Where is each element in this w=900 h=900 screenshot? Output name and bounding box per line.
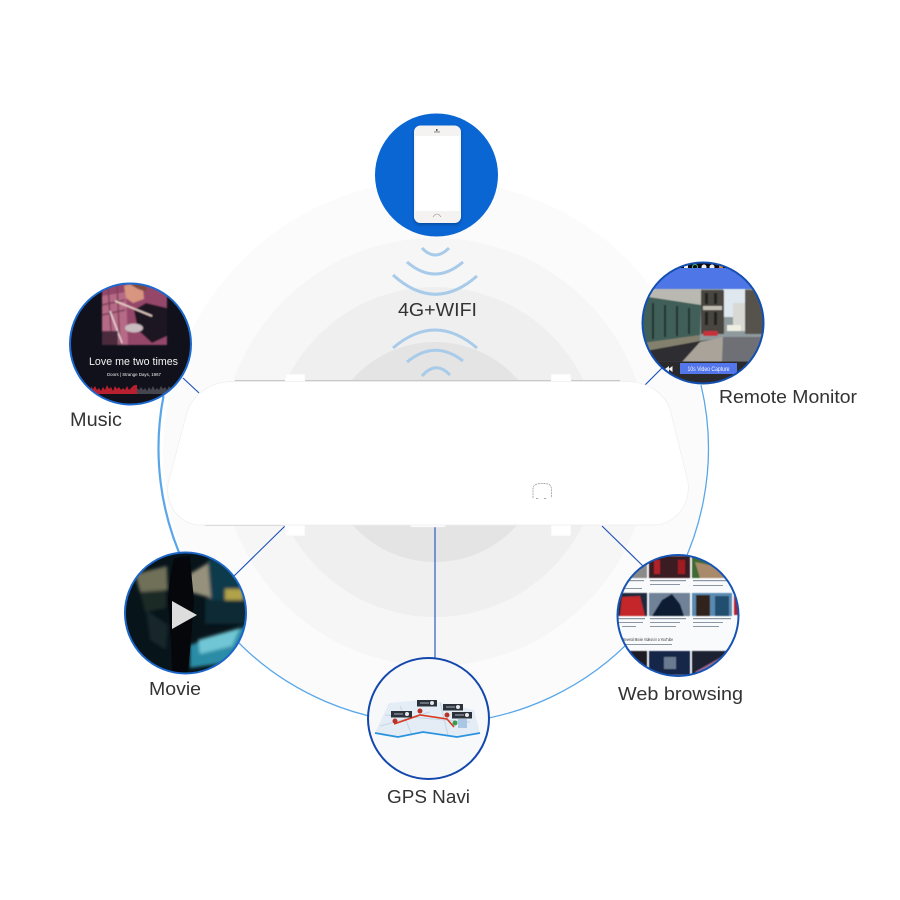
label: Movie: Movie xyxy=(149,678,201,699)
label: Music: Music xyxy=(70,410,122,431)
bottom control bar xyxy=(658,362,748,382)
web browsing badge xyxy=(618,555,739,676)
rewind icon xyxy=(665,366,672,372)
phone badge xyxy=(375,114,498,236)
caption lines xyxy=(618,580,731,645)
song subtitle: Doors | Strange Days, 1967 xyxy=(107,372,161,378)
car icon on mirror xyxy=(533,484,552,498)
blue orbit ring xyxy=(158,385,708,724)
concentric signal circles xyxy=(163,180,707,724)
audio waveform xyxy=(91,385,175,394)
route info labels xyxy=(391,700,472,718)
label: 4G+WIFI: 4G+WIFI xyxy=(398,299,477,320)
video thumbnails xyxy=(618,556,739,675)
song title: Love me two times xyxy=(89,356,178,368)
label: Remote Monitor: Remote Monitor xyxy=(719,386,857,407)
connector lines xyxy=(183,368,662,660)
street photo xyxy=(640,289,766,362)
silhouette xyxy=(168,556,194,672)
label: Web browsing: Web browsing xyxy=(618,683,743,704)
gps navi badge xyxy=(368,658,489,779)
wifi signal arcs xyxy=(393,248,477,376)
album photo xyxy=(102,283,167,345)
capture button: 10s Video Capture xyxy=(688,367,730,373)
mirror mounting tabs xyxy=(285,374,571,536)
blue title bar xyxy=(654,268,752,290)
movie badge xyxy=(124,551,250,675)
section heading: Several Movie Videos in a YouTube xyxy=(623,637,673,642)
remote monitor badge xyxy=(640,260,766,388)
map pins xyxy=(392,708,450,724)
label: GPS Navi: GPS Navi xyxy=(387,786,470,807)
map fold edge xyxy=(375,732,480,737)
icon: play triangle xyxy=(172,601,197,629)
music badge xyxy=(69,283,193,405)
mirror bottom edge xyxy=(205,525,285,526)
mirror body xyxy=(168,382,688,525)
status icons xyxy=(684,264,723,268)
folded map xyxy=(375,700,480,737)
rearview mirror device xyxy=(168,374,688,536)
infographic canvas xyxy=(69,114,857,803)
route line xyxy=(394,715,454,727)
film still xyxy=(135,558,250,668)
mirror top edge shadow xyxy=(235,380,620,382)
icon: smartphone xyxy=(414,126,461,223)
destination pin xyxy=(452,720,458,726)
